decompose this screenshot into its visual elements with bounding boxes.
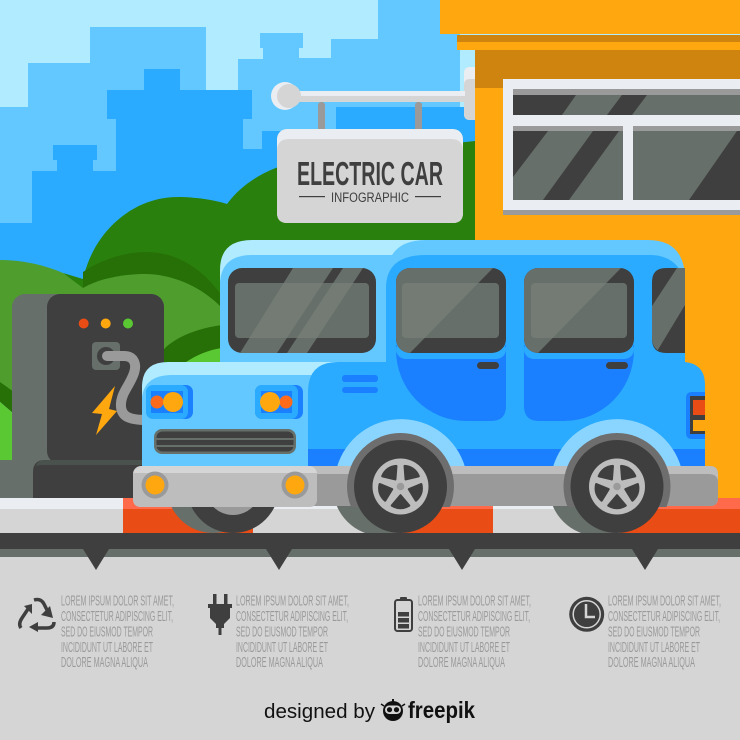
hills xyxy=(0,141,475,470)
sky background xyxy=(0,0,740,560)
cabin rear xyxy=(386,240,685,370)
building xyxy=(440,0,740,499)
electric car xyxy=(133,240,718,540)
electric car infographic: CONSECTETUR ADIPISCING ELIT, xyxy=(61,609,173,625)
charging station xyxy=(0,294,164,498)
text block 2: SED DO EIUSMOD TEMPOR xyxy=(236,624,328,640)
cabin front xyxy=(220,240,430,365)
body xyxy=(308,362,705,467)
socket xyxy=(92,342,120,370)
near city skyline xyxy=(0,69,475,320)
window 2 xyxy=(396,268,506,353)
footer credit: designed by xyxy=(264,701,375,723)
timeline markers xyxy=(83,549,658,570)
electric car infographic: LOREM IPSUM DOLOR SIT AMET, xyxy=(61,594,174,610)
text block 1: INCIDIDUNT UT LABORE ET xyxy=(61,640,153,656)
text block 3 xyxy=(418,594,531,671)
text block 1: SED DO EIUSMOD TEMPOR xyxy=(61,624,153,640)
footer credit: freepik xyxy=(408,697,475,723)
text block 3: INCIDIDUNT UT LABORE ET xyxy=(418,640,510,656)
window 4 xyxy=(652,268,685,353)
electric car infographic: LOREM IPSUM DOLOR SIT AMET, xyxy=(418,594,531,610)
text block 4 xyxy=(608,594,721,671)
electric car infographic: CONSECTETUR ADIPISCING ELIT, xyxy=(236,609,348,625)
left headlight xyxy=(146,385,193,419)
window xyxy=(503,79,740,215)
side vents xyxy=(342,375,378,393)
sign bracket xyxy=(271,67,475,134)
text block 1 xyxy=(61,594,174,671)
middle wheel xyxy=(347,433,454,540)
text block 1: DOLORE MAGNA ALIQUA xyxy=(61,655,148,671)
road xyxy=(0,533,740,740)
right headlight xyxy=(255,385,303,419)
text block 3: DOLORE MAGNA ALIQUA xyxy=(418,655,505,671)
electric car infographic: LOREM IPSUM DOLOR SIT AMET, xyxy=(236,594,349,610)
window 1 xyxy=(228,268,376,353)
window 3 xyxy=(524,268,634,353)
icon: plug xyxy=(208,594,232,635)
sign subtitle: INFOGRAPHIC xyxy=(331,190,409,205)
hanging sign xyxy=(271,67,475,223)
tail light xyxy=(686,392,705,439)
text block 2 xyxy=(236,594,349,671)
rear wheel xyxy=(564,433,670,540)
icon: freepik logo xyxy=(381,699,405,721)
door handles xyxy=(477,362,628,369)
icon: battery xyxy=(395,597,412,631)
window surrounds xyxy=(396,340,634,359)
text block 2: INCIDIDUNT UT LABORE ET xyxy=(236,640,328,656)
icon: recycle xyxy=(20,600,54,632)
far city skyline xyxy=(0,0,460,300)
text block 3: SED DO EIUSMOD TEMPOR xyxy=(418,624,510,640)
electric car infographic: CONSECTETUR ADIPISCING ELIT, xyxy=(418,609,530,625)
status lights xyxy=(79,318,133,328)
icon: clock xyxy=(569,597,604,632)
door front xyxy=(396,345,506,421)
wheel arches xyxy=(337,419,681,467)
sign board xyxy=(277,129,463,223)
front wheel xyxy=(172,507,274,533)
door rear xyxy=(524,345,634,421)
lower trim xyxy=(308,449,705,467)
hood xyxy=(142,362,345,467)
rear shadows xyxy=(336,506,616,533)
grille xyxy=(154,429,296,454)
footer credit xyxy=(264,697,475,723)
text block 2: DOLORE MAGNA ALIQUA xyxy=(236,655,323,671)
sign title: ELECTRIC CAR xyxy=(297,155,443,192)
charging cable xyxy=(107,356,146,420)
side skirt xyxy=(300,466,718,506)
lightning bolt xyxy=(92,386,117,435)
curb xyxy=(0,498,740,533)
front bumper xyxy=(133,466,317,507)
